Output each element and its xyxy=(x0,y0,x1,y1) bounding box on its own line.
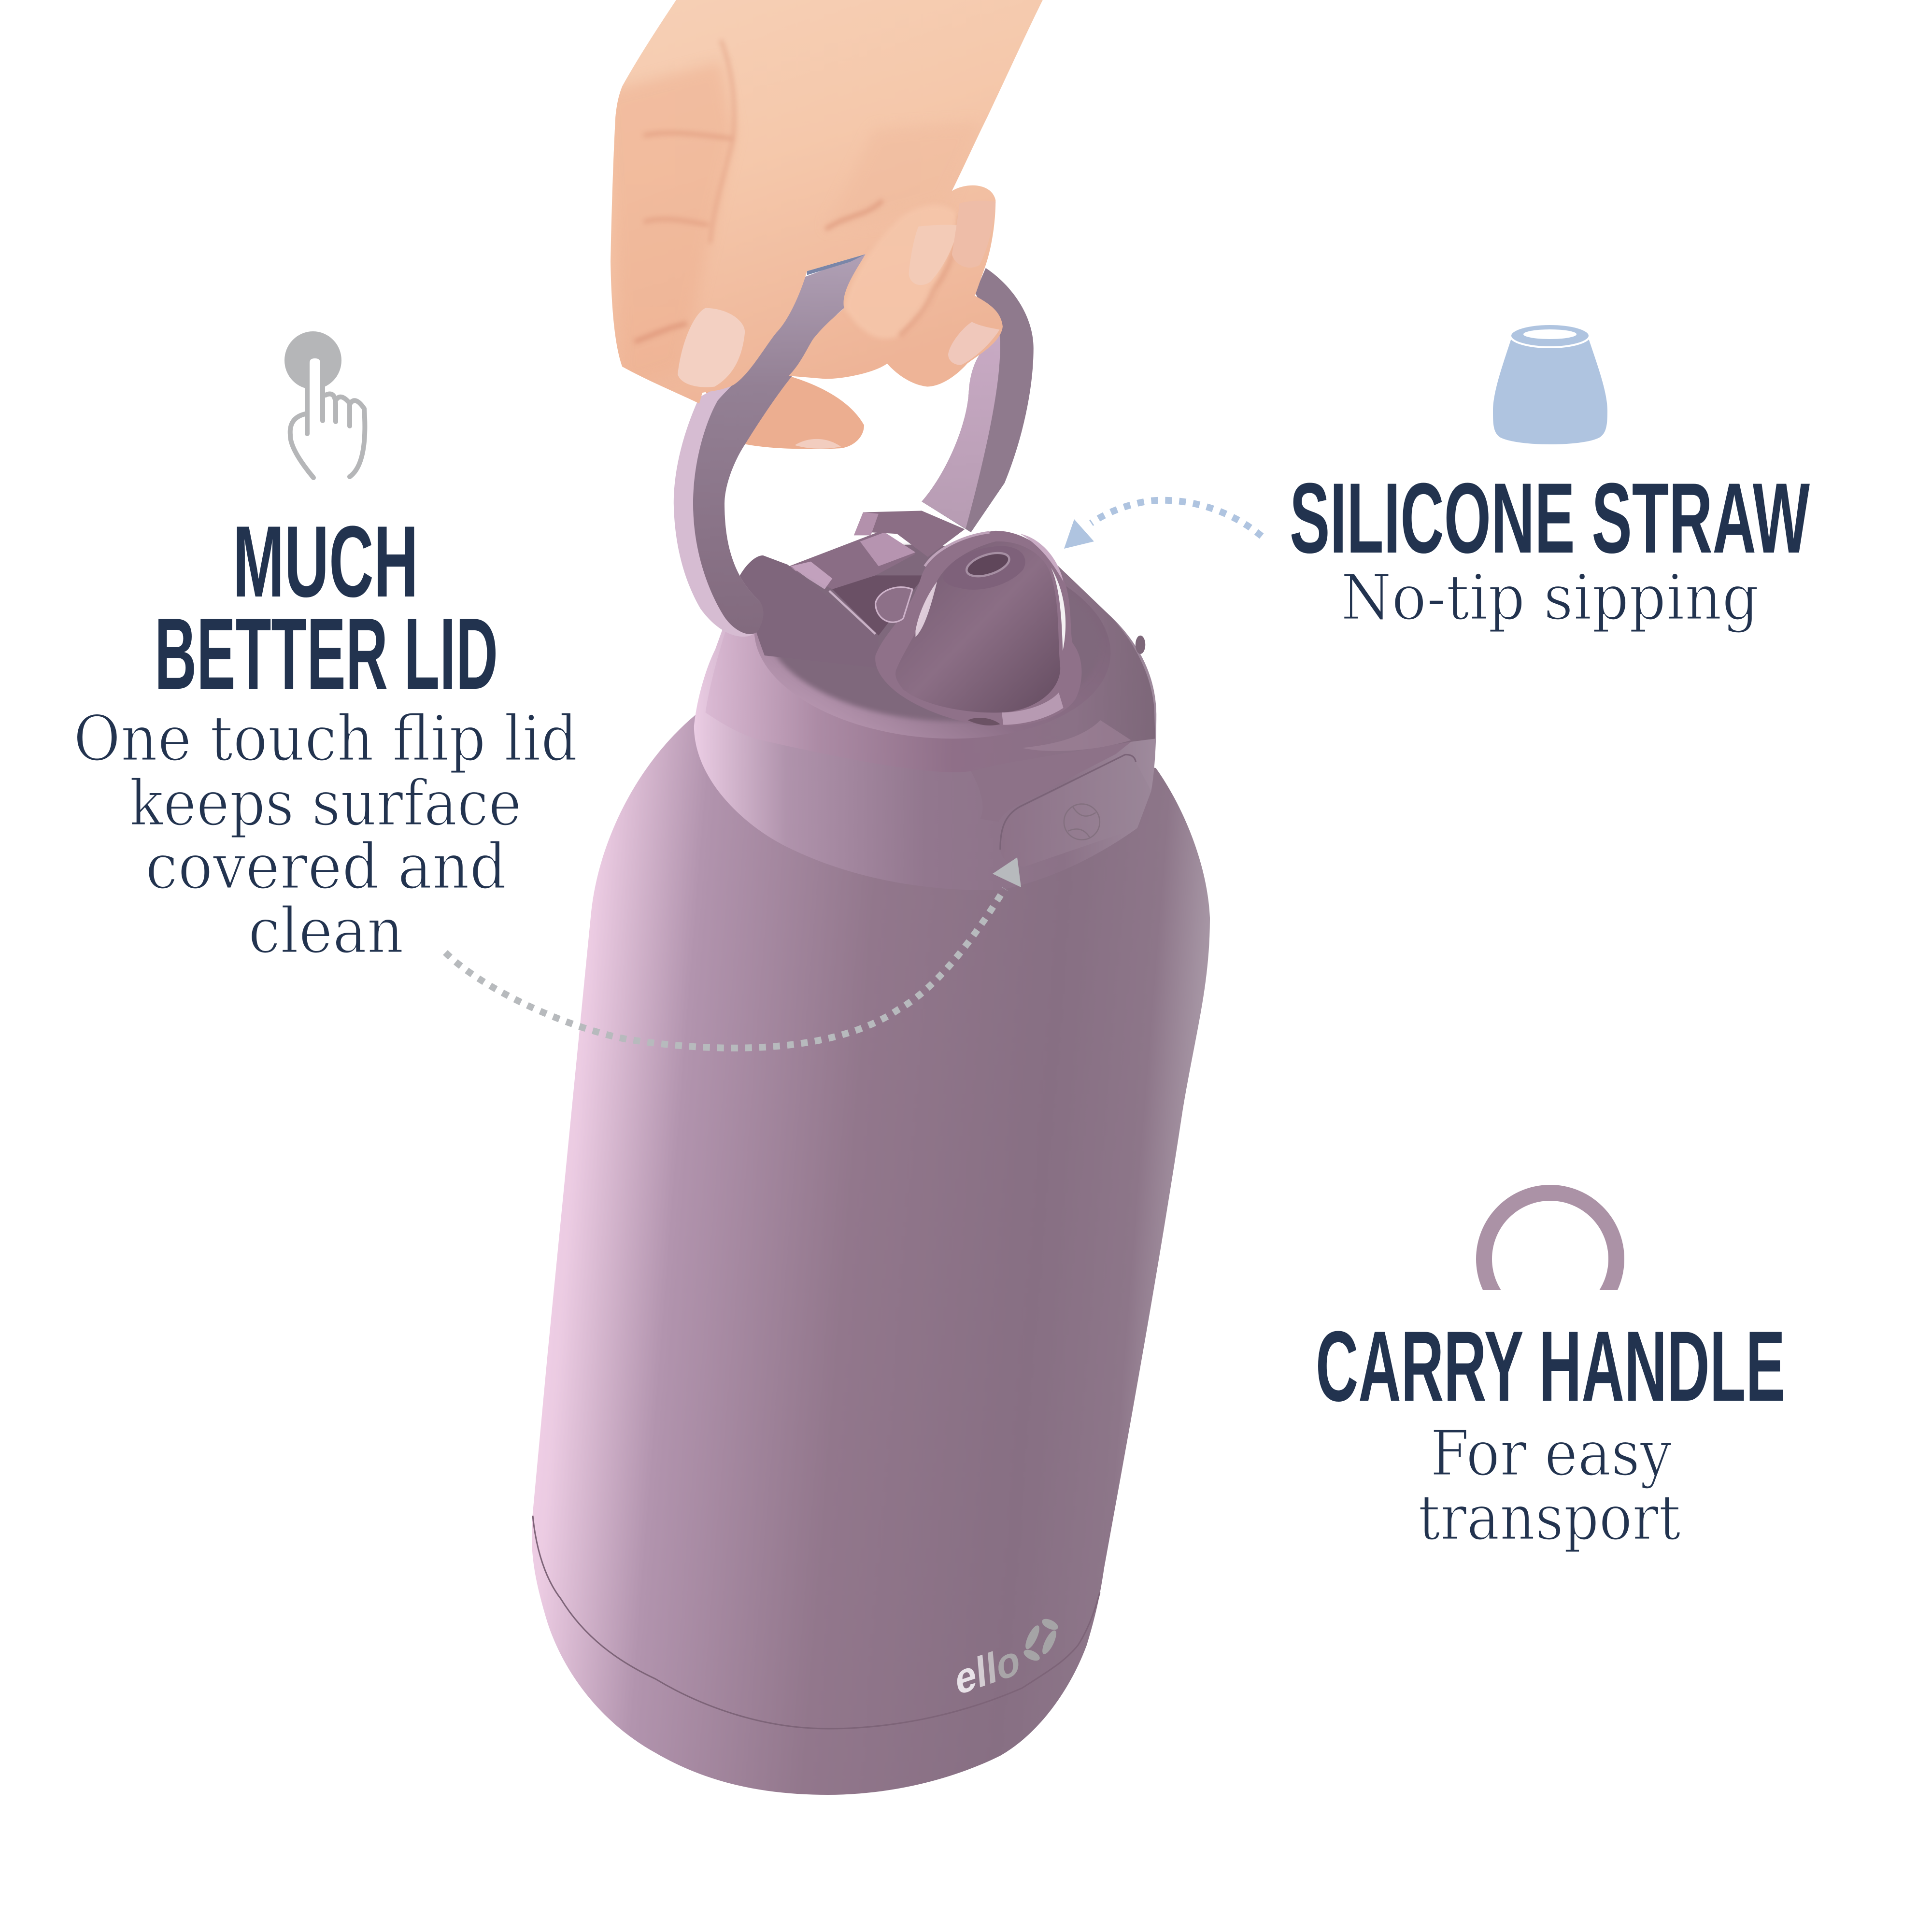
spout top face xyxy=(943,546,1025,590)
lid disc rim xyxy=(746,530,1119,753)
lower palm shadow xyxy=(825,123,980,228)
spout opening xyxy=(964,548,1012,581)
bottle xyxy=(532,715,1210,1795)
arrowhead xyxy=(1064,519,1094,549)
thumb nail xyxy=(678,308,745,387)
flip lid flap xyxy=(740,555,879,668)
body text: covered and xyxy=(145,830,507,903)
push button xyxy=(1000,754,1151,867)
body text xyxy=(73,702,578,967)
carry handle right xyxy=(922,268,1034,532)
finger shadow xyxy=(899,215,960,336)
body text: One touch flip lid xyxy=(73,702,578,775)
ring nail xyxy=(948,322,1000,365)
ridge highlight xyxy=(1022,720,1131,751)
icon: handle ring xyxy=(1484,1193,1616,1325)
handle blue edge xyxy=(807,254,866,275)
handle back xyxy=(696,268,1034,532)
handle inner face xyxy=(922,334,1000,528)
clear window xyxy=(789,531,915,589)
index nail xyxy=(909,225,959,285)
dotted arrow: lid callout xyxy=(445,857,1021,1048)
body text: For easy xyxy=(1430,1417,1672,1490)
heading: BETTER LID xyxy=(155,597,498,710)
hinge block xyxy=(854,511,965,557)
lid notch chevron xyxy=(971,742,1131,822)
soft creases xyxy=(635,40,882,342)
side nub xyxy=(1136,636,1145,654)
hand shading xyxy=(604,40,980,388)
bottle body xyxy=(532,715,1210,1795)
handle dark face xyxy=(693,254,866,634)
index finger below handle xyxy=(696,376,864,449)
palm side shadow xyxy=(611,64,732,379)
body text: transport xyxy=(1418,1481,1681,1554)
carry handle left xyxy=(674,254,866,637)
heading xyxy=(155,505,498,710)
lid flat disc xyxy=(757,533,1108,735)
hand xyxy=(604,0,1043,404)
spout glass xyxy=(875,531,1081,726)
icon: touch finger xyxy=(284,331,365,478)
body text: clean xyxy=(248,894,404,967)
clear hinge detail xyxy=(791,532,915,634)
dark recess xyxy=(832,575,925,636)
logo: ello xyxy=(953,1614,1062,1705)
heading: MUCH xyxy=(233,505,418,618)
hinge and spout xyxy=(854,511,1151,867)
bottle base seam xyxy=(533,1516,1100,1729)
button logo xyxy=(1064,804,1100,840)
lid outer shell xyxy=(694,541,1156,890)
lid xyxy=(694,530,1156,890)
panel: carry handle xyxy=(1316,1193,1785,1554)
lid upper tier xyxy=(705,541,1155,772)
panel: silicone straw xyxy=(1290,324,1810,634)
icon: silicone straw xyxy=(1493,324,1607,444)
index finger xyxy=(844,205,959,339)
arrowhead xyxy=(993,857,1021,887)
panel: much better lid xyxy=(73,331,578,967)
body text: No-tip sipping xyxy=(1341,561,1759,634)
logo mark xyxy=(1020,1614,1062,1665)
spout core xyxy=(895,541,1060,713)
spout highlights xyxy=(1051,568,1065,651)
glass bubble xyxy=(876,587,912,622)
logo: ello: ello xyxy=(953,1635,1022,1705)
silicone straw spout xyxy=(875,531,1081,726)
fingernails xyxy=(678,201,1000,387)
hand and left handle xyxy=(604,0,1043,637)
body text: keeps surface xyxy=(129,767,522,840)
dotted arrow: straw callout xyxy=(1064,500,1262,549)
body text xyxy=(1418,1417,1681,1554)
index fingertip nail xyxy=(795,439,841,449)
middle nail xyxy=(952,201,995,268)
hinge side xyxy=(854,512,879,535)
